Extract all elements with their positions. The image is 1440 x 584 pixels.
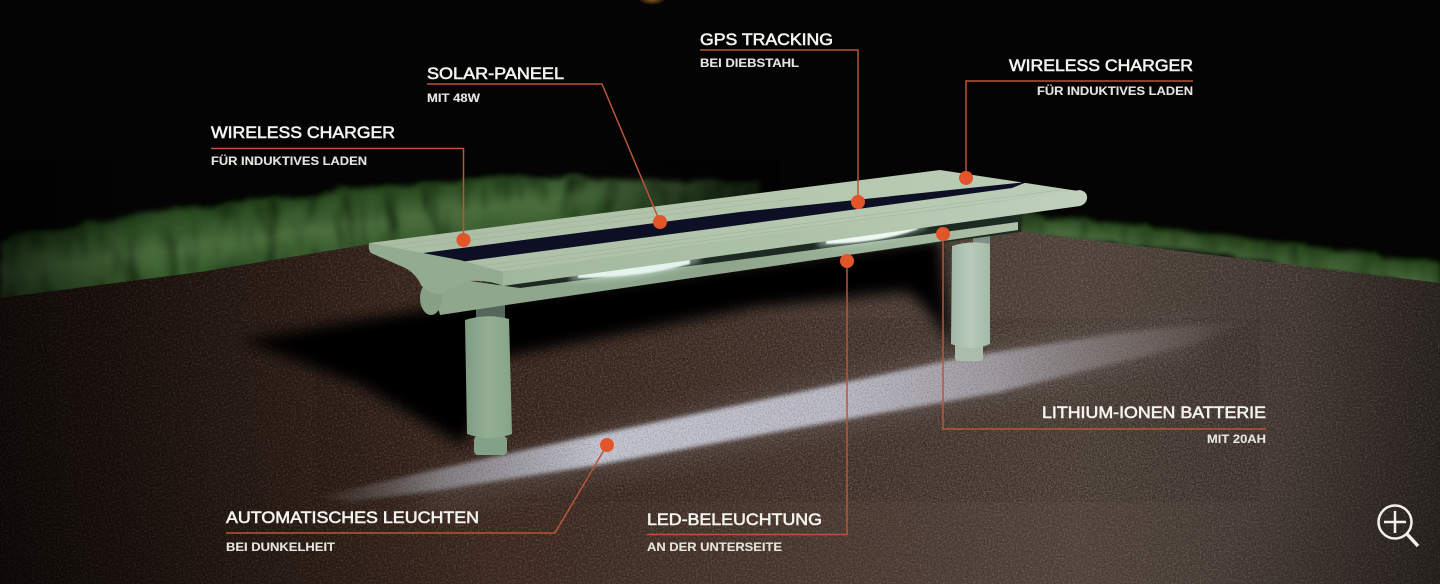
LED glow left	[570, 256, 700, 281]
subheading: MIT 20AH	[1207, 432, 1266, 446]
marker	[840, 254, 854, 268]
lawn: left grass	[0, 160, 780, 310]
icon: zoom magnifier	[1378, 506, 1418, 546]
leader line	[700, 50, 858, 202]
callout: LED lighting	[647, 254, 854, 554]
seat end profile	[369, 243, 503, 294]
solar panel	[423, 182, 1027, 262]
bench shadow	[240, 238, 952, 445]
leader line	[226, 445, 607, 533]
subheading: FÜR INDUKTIVES LADEN	[211, 153, 367, 168]
callout: automatic lighting	[226, 438, 614, 554]
marker	[653, 215, 667, 229]
marker	[936, 227, 950, 241]
marker	[959, 171, 973, 185]
distant light	[638, 0, 666, 5]
marker	[456, 233, 470, 247]
callout: lithium-ion battery	[936, 227, 1266, 446]
marker	[851, 195, 865, 209]
lawn: right grass	[1020, 212, 1440, 290]
subheading: AN DER UNTERSEITE	[647, 540, 782, 554]
heading: AUTOMATISCHES LEUCHTEN	[226, 508, 479, 527]
heading: WIRELESS CHARGER	[211, 123, 395, 142]
heading: GPS TRACKING	[700, 30, 833, 49]
seat front	[503, 190, 1087, 286]
subheading: BEI DUNKELHEIT	[226, 540, 336, 554]
left leg	[465, 298, 512, 455]
leader line	[943, 234, 1266, 429]
callout: wireless charger right	[959, 56, 1193, 185]
leader line	[647, 261, 847, 534]
heading: LITHIUM-IONEN BATTERIE	[1042, 403, 1266, 422]
heading: WIRELESS CHARGER	[1009, 56, 1193, 75]
leader line	[427, 84, 660, 222]
callout: wireless charger left	[211, 123, 470, 247]
bench	[369, 170, 1087, 455]
tube end cap	[420, 281, 442, 315]
subheading: FÜR INDUKTIVES LADEN	[1037, 83, 1193, 98]
seat slats	[385, 190, 1070, 269]
leader line	[211, 148, 464, 240]
subheading: MIT 48W	[427, 91, 481, 105]
light strip on the ground	[316, 318, 1260, 502]
lower tube	[431, 222, 1018, 315]
subheading: BEI DIEBSTAHL	[700, 56, 799, 70]
marker	[600, 438, 614, 452]
leader line	[966, 81, 1193, 178]
seat top	[369, 170, 1085, 272]
ground: gravel path	[0, 230, 1440, 584]
callout: GPS tracking	[700, 30, 865, 209]
LED glow right	[818, 222, 926, 247]
right leg	[951, 228, 990, 361]
underside	[470, 213, 1021, 306]
light spill around strip	[400, 325, 1200, 505]
heading: LED-BELEUCHTUNG	[647, 510, 822, 529]
heading: SOLAR-PANEEL	[427, 64, 564, 83]
callout: solar panel	[427, 64, 667, 229]
